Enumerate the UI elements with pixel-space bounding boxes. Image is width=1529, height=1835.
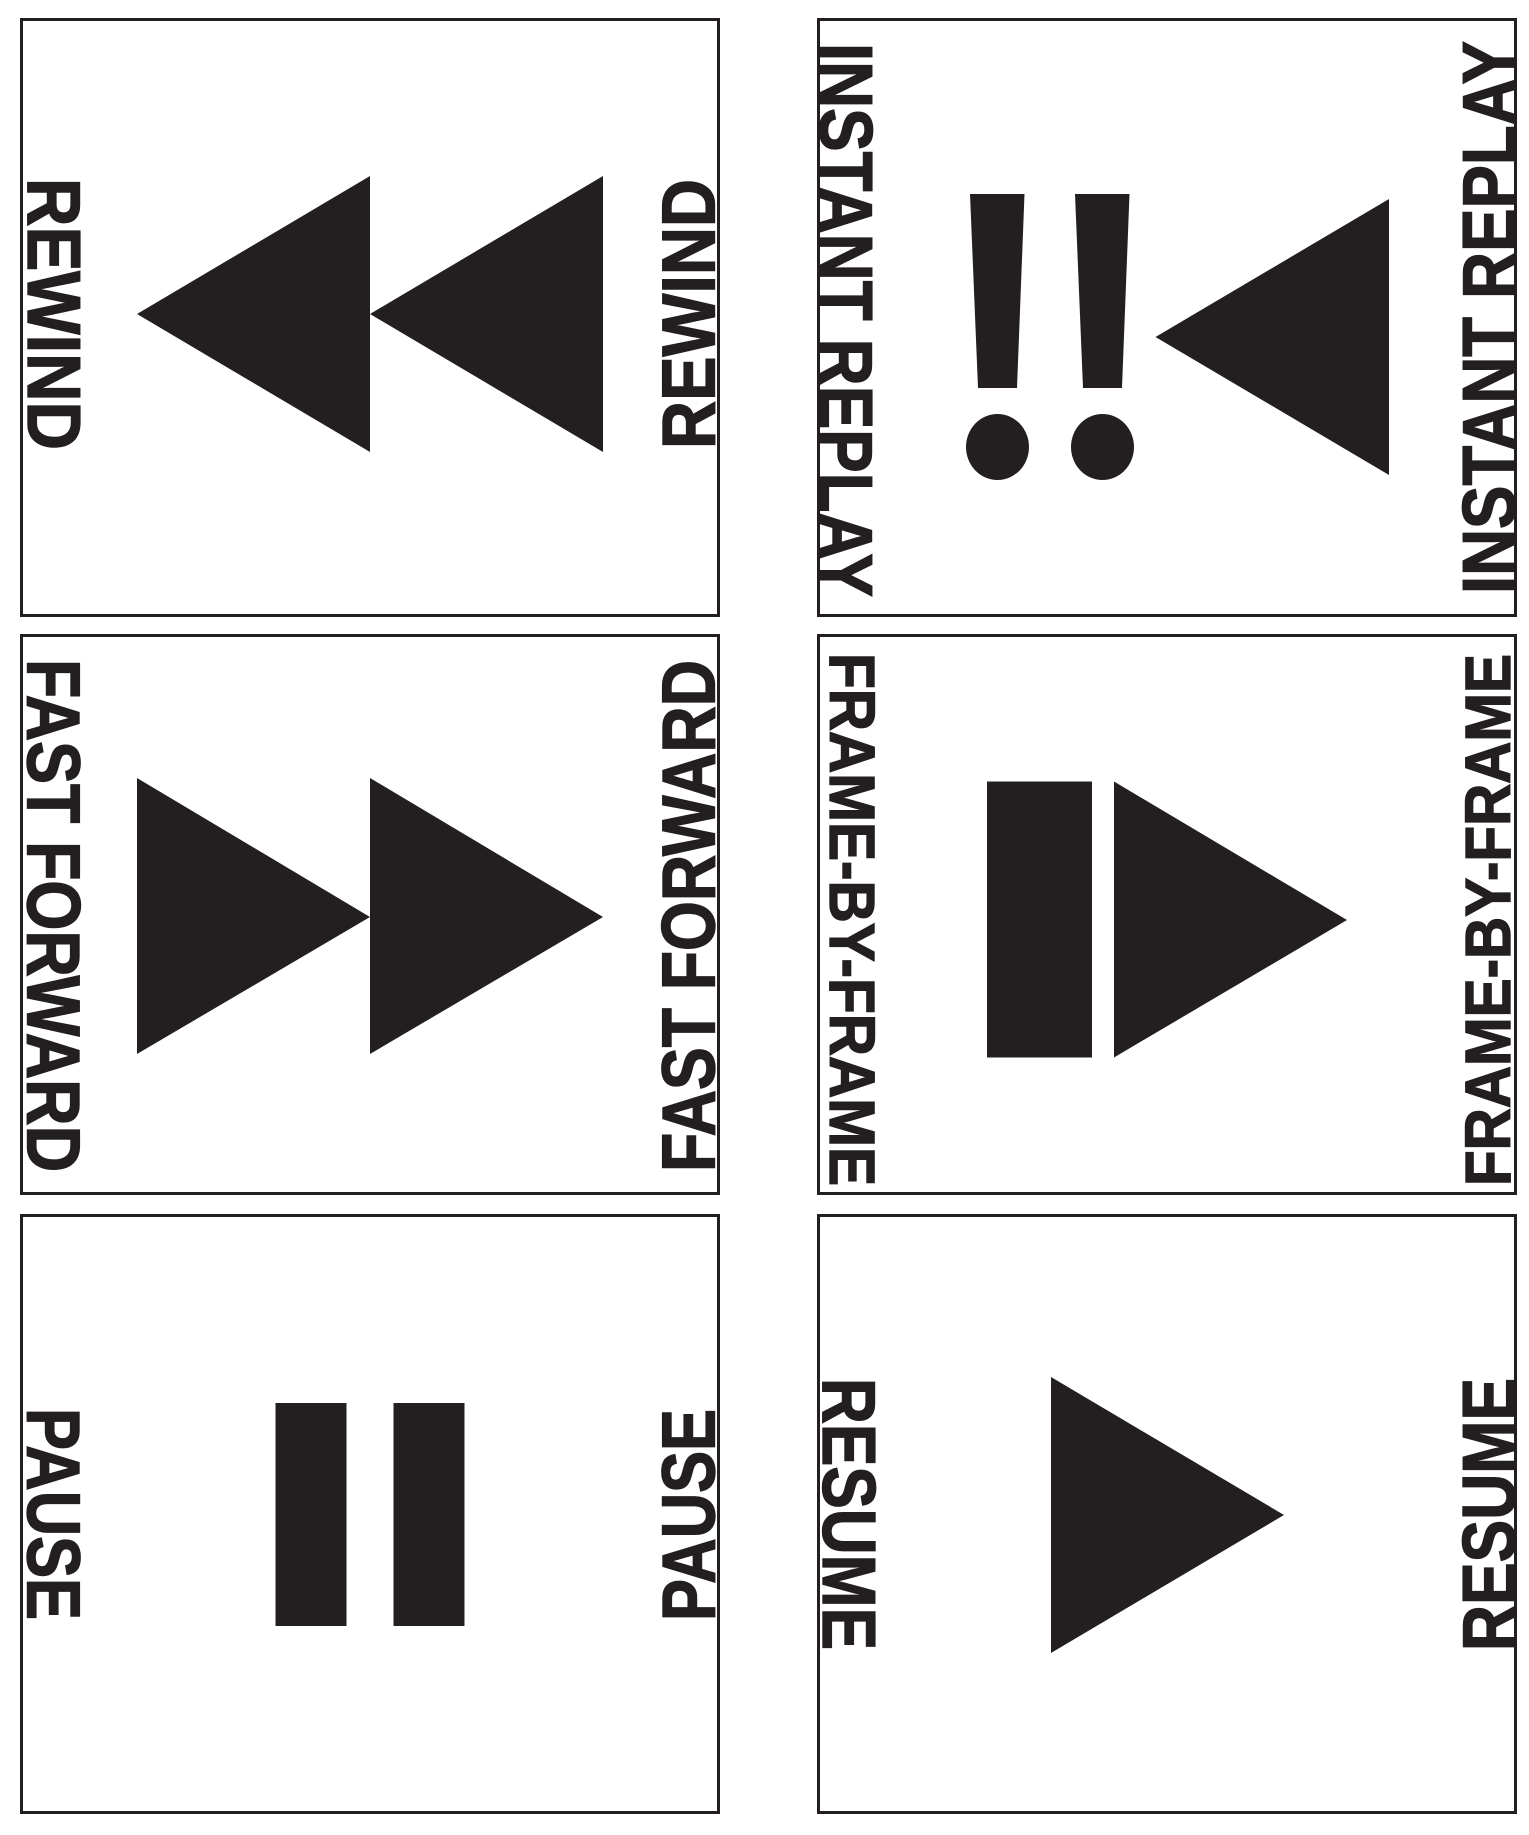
panel: pause bbox=[12, 1216, 730, 1812]
label: frame-by-frame right: FRAME-BY-FRAME bbox=[1452, 654, 1524, 1186]
label: rewind right: REWIND bbox=[646, 179, 730, 449]
label: fast forward left: FAST FORWARD bbox=[12, 659, 96, 1172]
icon: reverse triangle bbox=[1156, 199, 1389, 475]
label: pause left: PAUSE bbox=[12, 1408, 96, 1620]
panel: resume bbox=[807, 1216, 1529, 1812]
icon: rewind double triangle bbox=[137, 176, 603, 452]
label: resume right: RESUME bbox=[1447, 1378, 1529, 1651]
icon: play triangle bbox=[1051, 1377, 1284, 1653]
label: resume left: RESUME bbox=[807, 1378, 891, 1650]
panel: frame-by-frame bbox=[816, 636, 1524, 1194]
icon: play triangle bbox=[1114, 782, 1347, 1058]
icon: fast forward double triangle bbox=[137, 778, 603, 1054]
icon: frame bar bbox=[987, 782, 1092, 1058]
label: instant replay left: INSTANT REPLAY bbox=[804, 43, 888, 597]
panel: fast forward bbox=[12, 636, 730, 1194]
label: pause right: PAUSE bbox=[646, 1409, 730, 1621]
label: fast forward right: FAST FORWARD bbox=[646, 660, 730, 1172]
panel: instant replay bbox=[804, 20, 1529, 616]
icon: double exclamation bbox=[966, 194, 1134, 480]
label: frame-by-frame left: FRAME-BY-FRAME bbox=[816, 653, 888, 1186]
panel: rewind bbox=[12, 20, 730, 616]
label: rewind left: REWIND bbox=[12, 178, 96, 450]
icon: pause bars bbox=[276, 1403, 464, 1626]
